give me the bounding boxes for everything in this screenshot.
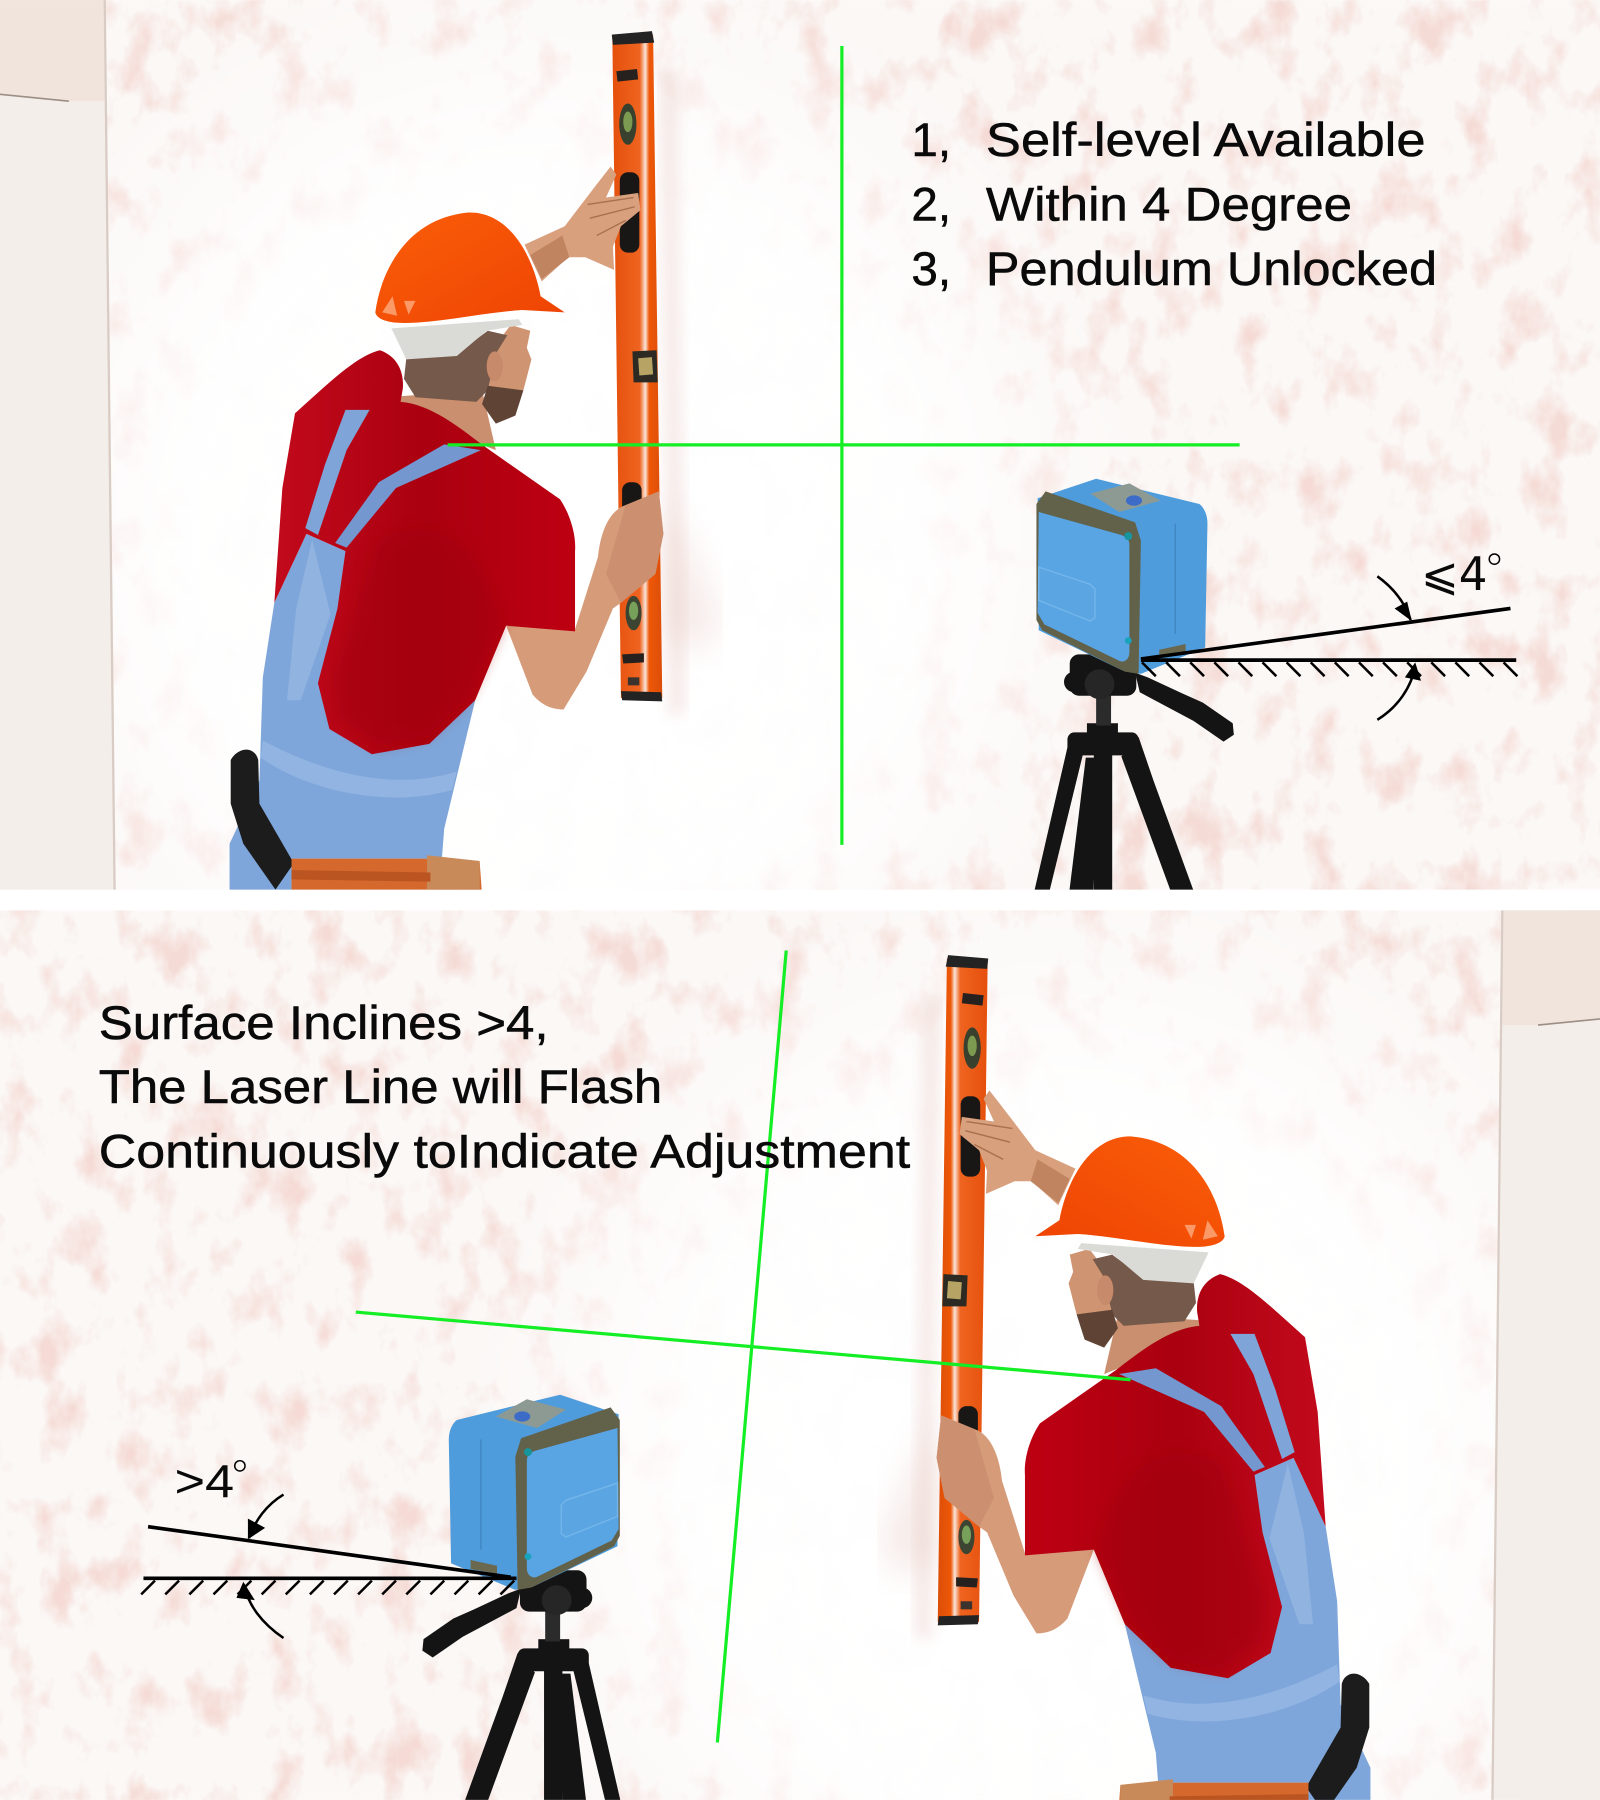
neck — [396, 390, 496, 450]
laser level on tripod, beyond 4 degree — [422, 1395, 626, 1800]
degree mark — [1489, 554, 1500, 564]
laser cross lines — [448, 46, 1240, 845]
panel: within 4 degree scene — [0, 0, 1600, 907]
orange hard hat — [375, 212, 565, 323]
worker upper hand — [525, 167, 640, 281]
laser level on tripod, within 4 degree — [1031, 479, 1234, 907]
laser cross lines tilted — [356, 951, 1131, 1742]
tilt diagram: within 4 degrees — [1141, 576, 1517, 720]
warning text: Continuously toIndicate Adjustment — [99, 1125, 910, 1178]
label: at most 4 degrees: ⩽4 — [1421, 547, 1488, 601]
feature list: 1, — [911, 114, 951, 167]
warning text — [99, 997, 910, 1178]
wall background — [0, 0, 1600, 907]
worker holding spirit level — [230, 31, 717, 907]
cube front cover — [1038, 512, 1129, 661]
label: over 4 degrees: >4 — [174, 1455, 234, 1507]
warning text: The Laser Line will Flash — [99, 1061, 662, 1114]
feature list — [911, 114, 1437, 296]
feature list: 3, — [911, 243, 951, 296]
red shirt — [274, 350, 575, 754]
tool holder and belt — [231, 750, 482, 895]
hard hat harness — [391, 319, 522, 359]
head hair and beard — [488, 325, 531, 393]
feature list: Pendulum Unlocked — [986, 243, 1437, 296]
warning text: Surface Inclines >4, — [99, 997, 549, 1050]
wall background mirrored — [0, 901, 1600, 1800]
cube body — [1038, 479, 1207, 674]
blue overalls base — [230, 534, 475, 907]
feature list: 2, — [911, 179, 951, 232]
overall straps — [305, 410, 370, 535]
worker mirrored — [883, 955, 1370, 1800]
feature list: Self-level Available — [986, 114, 1426, 167]
tripod — [1031, 654, 1234, 907]
spirit level — [612, 31, 662, 701]
tilt diagram: over 4 degrees — [141, 1495, 516, 1638]
panel: beyond 4 degree scene — [0, 901, 1600, 1800]
cube olive frame — [1036, 491, 1141, 674]
feature list: Within 4 Degree — [986, 179, 1352, 232]
degree mark — [235, 1461, 245, 1471]
worker lower arm and hand — [506, 491, 663, 709]
